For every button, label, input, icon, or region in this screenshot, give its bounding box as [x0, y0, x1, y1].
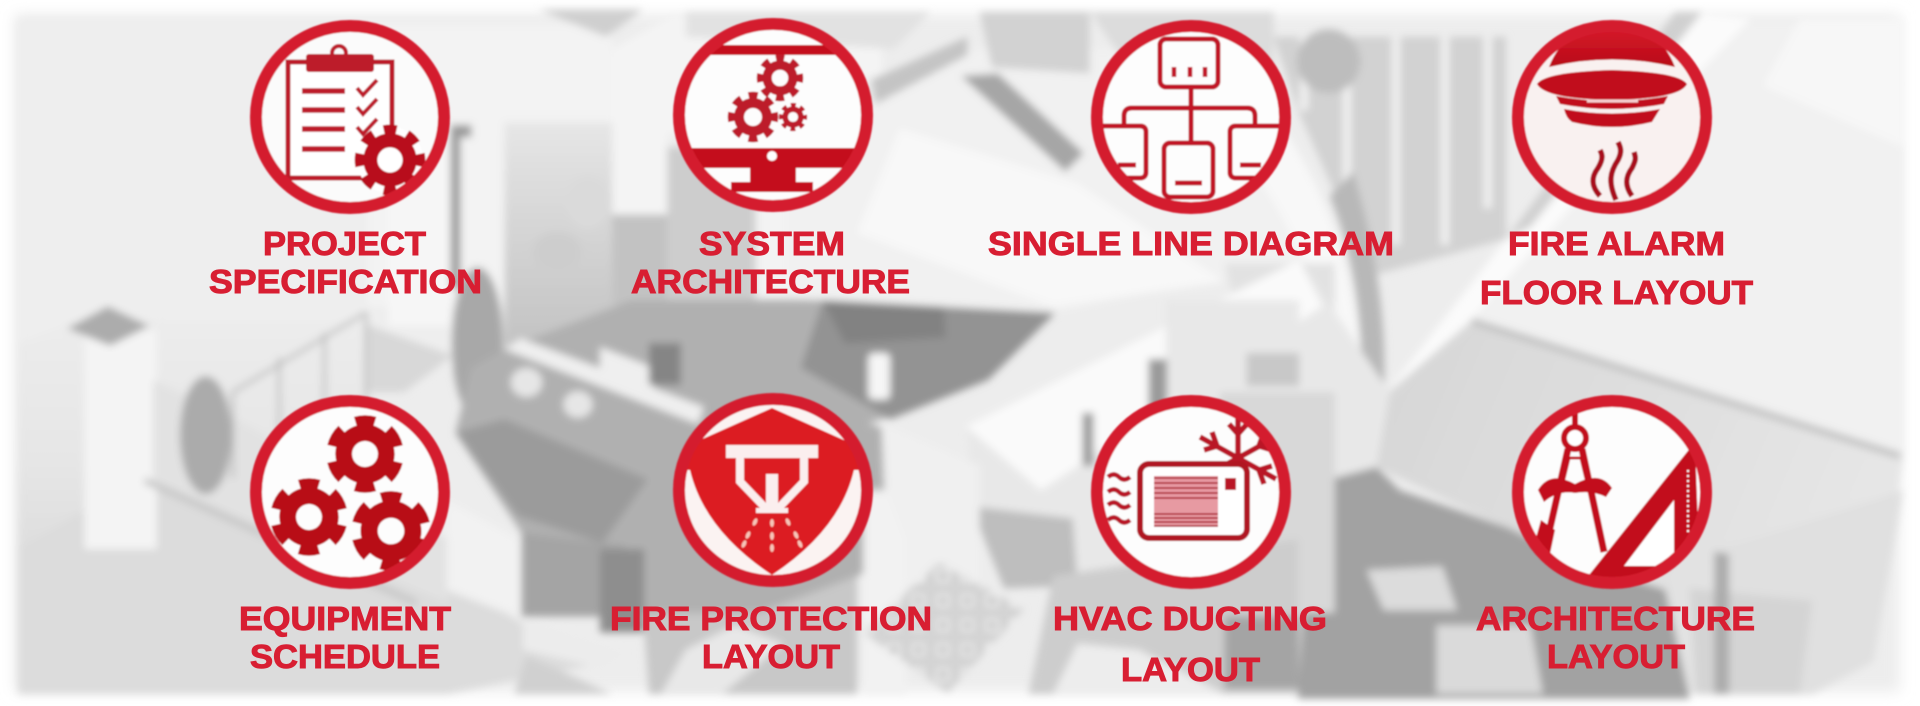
icon: smoke detector: [1518, 25, 1706, 208]
label: fire alarm floor layout: FLOOR LAYOUT: [1480, 274, 1753, 311]
icon: clipboard with gear: [256, 26, 444, 208]
label: system architecture: SYSTEM: [699, 225, 845, 262]
label: system architecture: ARCHITECTURE: [631, 263, 910, 300]
label: project specification: PROJECT: [263, 225, 426, 262]
label: hvac ducting layout: HVAC DUCTING: [1053, 600, 1327, 637]
panel: architecture layout: [1476, 401, 1755, 675]
label: hvac ducting layout: LAYOUT: [1121, 651, 1260, 688]
label: architecture layout: [1476, 600, 1755, 675]
label: fire protection layout: FIRE PROTECTION: [610, 600, 932, 637]
icon: monitor with gears: [679, 24, 870, 206]
label: fire alarm floor layout: FIRE ALARM: [1508, 225, 1725, 262]
label: fire protection layout: LAYOUT: [702, 638, 840, 675]
icon: sprinkler on shield: [679, 399, 867, 581]
label: fire alarm floor layout: [1480, 225, 1753, 311]
label: equipment schedule: EQUIPMENT: [239, 600, 451, 637]
label: architecture layout: ARCHITECTURE: [1476, 600, 1755, 637]
panel: single line diagram: [988, 26, 1394, 262]
icon: compass and set square: [1518, 401, 1706, 583]
icon: air conditioner with snowflake: [1097, 401, 1285, 583]
icon: three gears: [256, 401, 444, 583]
icon: hierarchy tree: [1097, 26, 1285, 208]
label: equipment schedule: [239, 600, 451, 675]
panel: system architecture: [631, 24, 910, 300]
label: equipment schedule: SCHEDULE: [250, 638, 440, 675]
panel: fire protection layout: [610, 399, 932, 675]
panel: hvac ducting layout: [1053, 401, 1327, 688]
label: project specification: [209, 225, 482, 300]
panel: equipment schedule: [239, 401, 451, 675]
label: system architecture: [631, 225, 910, 300]
label: single line diagram: SINGLE LINE DIAGRAM: [988, 225, 1394, 262]
panel: project specification: [209, 26, 482, 300]
label: architecture layout: LAYOUT: [1547, 638, 1685, 675]
label: project specification: SPECIFICATION: [209, 263, 482, 300]
label: fire protection layout: [610, 600, 932, 675]
label: hvac ducting layout: [1053, 600, 1327, 688]
panel: fire alarm floor layout: [1480, 25, 1753, 311]
